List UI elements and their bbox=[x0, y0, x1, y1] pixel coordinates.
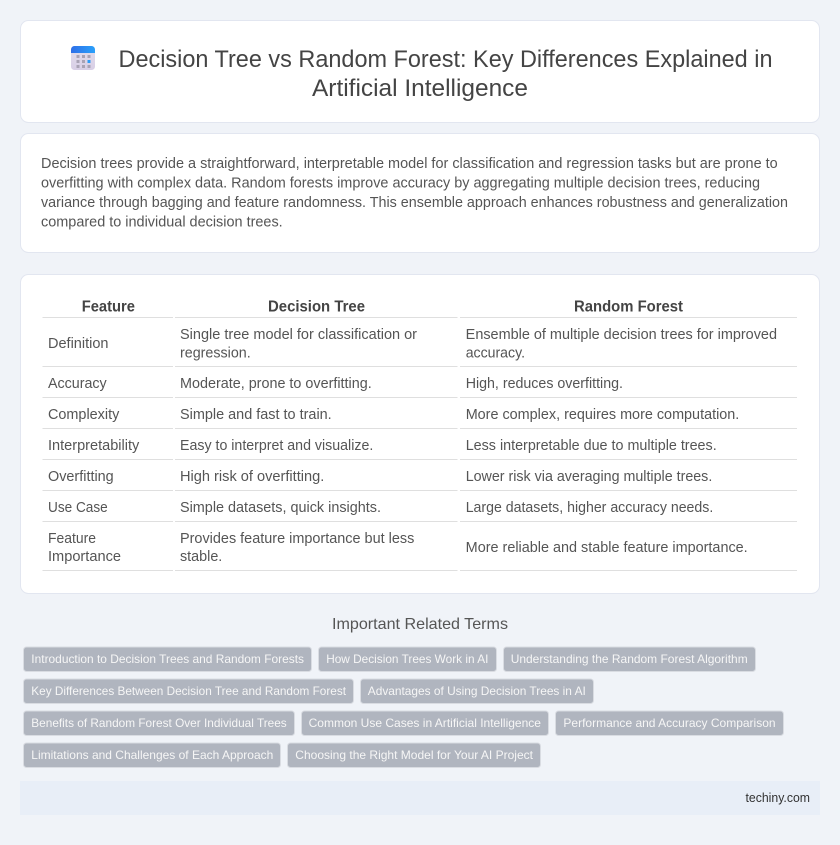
tag: Understanding the Random Forest Algorithm bbox=[511, 652, 748, 666]
row: complexity: More complex, requires more computation. bbox=[466, 407, 739, 423]
table header: Decision Tree bbox=[268, 299, 365, 316]
row: overfitting bbox=[48, 469, 712, 485]
tag bbox=[288, 743, 540, 768]
row: definition: Definition bbox=[48, 336, 108, 352]
row: complexity: Complexity bbox=[48, 407, 120, 423]
row: interpretability: Interpretability bbox=[48, 438, 140, 454]
title bbox=[118, 46, 772, 102]
panel: introduction bbox=[20, 134, 820, 252]
row: use case bbox=[48, 500, 713, 516]
row: use case: Large datasets, higher accuracy needs. bbox=[466, 500, 713, 516]
row: interpretability bbox=[48, 438, 717, 454]
tag bbox=[556, 711, 784, 736]
row: use case: Use Case bbox=[48, 500, 108, 516]
row: accuracy: Moderate, prone to overfitting. bbox=[180, 376, 372, 392]
text block: introduction: Decision trees provide a straightforward, interpretable model for classification and regression tasks but are prone to bbox=[41, 156, 778, 172]
row: definition: accuracy. bbox=[466, 345, 525, 361]
title: Decision Tree vs Random Forest: Key Differences Explained in bbox=[118, 46, 772, 73]
tag bbox=[24, 711, 294, 736]
text block: introduction: variance through bagging and feature randomness. This ensemble approach enhances robustness and generalization bbox=[41, 195, 788, 211]
tag: Choosing the Right Model for Your AI Project bbox=[295, 748, 534, 762]
table header: Random Forest bbox=[574, 299, 684, 316]
heading: important related terms: Important Related Terms bbox=[332, 616, 508, 633]
icon: calendar bbox=[71, 46, 95, 70]
tag: How Decision Trees Work in AI bbox=[326, 652, 488, 666]
panel: header bbox=[20, 20, 820, 122]
tag: Common Use Cases in Artificial Intelligence bbox=[309, 716, 541, 730]
tag bbox=[24, 679, 354, 704]
tag bbox=[24, 647, 312, 672]
row: interpretability: Less interpretable due to multiple trees. bbox=[466, 438, 717, 454]
text block: introduction: overfitting with complex data. Random forests improve accuracy by aggregating multiple decision trees, reducing bbox=[41, 176, 760, 192]
panel: comparison table bbox=[20, 274, 820, 594]
row: complexity: Simple and fast to train. bbox=[180, 407, 332, 423]
row: definition: regression. bbox=[180, 345, 251, 361]
tag bbox=[24, 743, 280, 768]
row: definition: Ensemble of multiple decision trees for improved bbox=[466, 327, 777, 343]
row: definition: Single tree model for classification or bbox=[180, 327, 417, 343]
row: feature importance: Feature bbox=[48, 531, 96, 547]
row: feature importance: stable. bbox=[180, 549, 222, 565]
row: accuracy: High, reduces overfitting. bbox=[466, 376, 623, 392]
tag: Advantages of Using Decision Trees in AI bbox=[368, 684, 586, 698]
tag: Benefits of Random Forest Over Individual Trees bbox=[31, 716, 287, 730]
text block: introduction bbox=[41, 156, 788, 230]
row: feature importance: Importance bbox=[48, 549, 121, 565]
tag: Limitations and Challenges of Each Approach bbox=[31, 748, 273, 762]
title: Artificial Intelligence bbox=[312, 75, 528, 102]
footer bbox=[20, 781, 820, 815]
row: accuracy: Accuracy bbox=[48, 376, 107, 392]
tag bbox=[302, 711, 548, 736]
table header bbox=[82, 299, 684, 316]
row: overfitting: High risk of overfitting. bbox=[180, 469, 324, 485]
row: feature importance: Provides feature importance but less bbox=[180, 531, 414, 547]
row: overfitting: Overfitting bbox=[48, 469, 114, 485]
tag list: related terms bbox=[24, 647, 784, 768]
text block: introduction: compared to individual decision trees. bbox=[41, 214, 283, 230]
row: feature importance: More reliable and stable feature importance. bbox=[466, 540, 748, 556]
footer: techiny.com bbox=[746, 791, 810, 805]
tag bbox=[504, 647, 756, 672]
row: feature importance bbox=[48, 531, 748, 565]
tag bbox=[318, 647, 496, 672]
row: overfitting: Lower risk via averaging multiple trees. bbox=[466, 469, 712, 485]
tag bbox=[360, 679, 594, 704]
row: accuracy bbox=[48, 376, 623, 392]
row: complexity bbox=[48, 407, 739, 423]
row: use case: Simple datasets, quick insights. bbox=[180, 500, 381, 516]
tag: Performance and Accuracy Comparison bbox=[563, 716, 776, 730]
tag: Key Differences Between Decision Tree and Random Forest bbox=[31, 684, 347, 698]
table header: Feature bbox=[82, 299, 135, 316]
tag: Introduction to Decision Trees and Random Forests bbox=[31, 652, 304, 666]
row: definition bbox=[48, 327, 777, 361]
row: interpretability: Easy to interpret and visualize. bbox=[180, 438, 373, 454]
